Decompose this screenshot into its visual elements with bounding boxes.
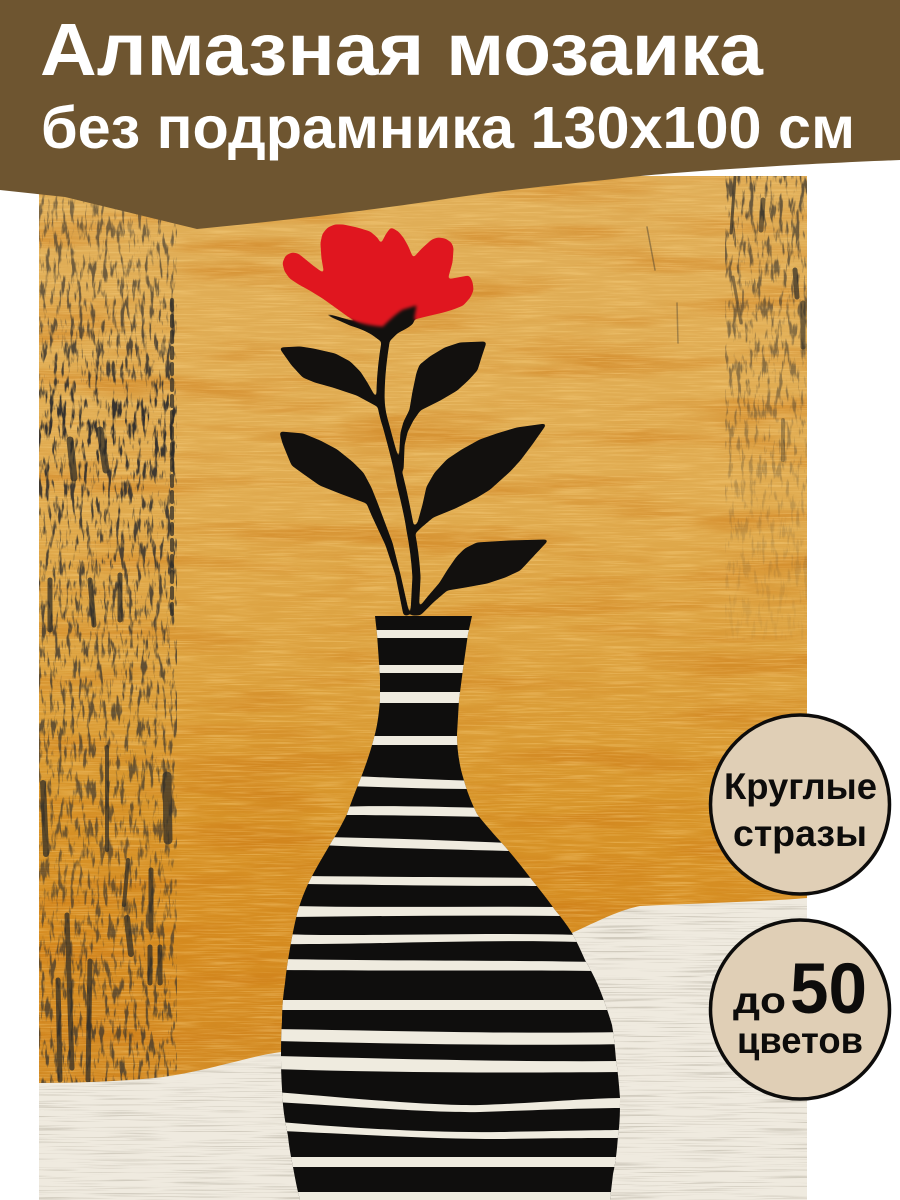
flower sepal: [323, 306, 416, 342]
vase body: [270, 610, 630, 1200]
badge: round rhinestones: [710, 715, 890, 894]
stem: [377, 342, 420, 615]
cream ground: [39, 890, 807, 1200]
broad brush patches: [39, 176, 807, 1096]
badge: up to 50 colours: до: [733, 980, 786, 1021]
red flower: [283, 225, 473, 327]
leaf lower right: [416, 540, 548, 615]
left band dark scratch marks: [39, 190, 177, 1090]
left band long streaks: [43, 300, 172, 1080]
plant: [280, 225, 548, 615]
title: Алмазная мозаика: [40, 8, 764, 91]
subtitle: без подрамника 130х100 см: [41, 95, 855, 161]
badge: up to 50 colours: [710, 920, 890, 1099]
ochre painted wall: [39, 176, 807, 1083]
badge: round rhinestones: Круглые: [724, 766, 877, 807]
leaf middle left: [280, 432, 409, 615]
vase white stripes: [275, 630, 625, 1200]
leaf upper left: [280, 347, 381, 408]
leaf upper right: [400, 342, 486, 470]
header banner: [0, 0, 900, 229]
panel: painting: [39, 176, 807, 1200]
fine light brush strokes: [39, 176, 807, 1096]
top right long streaks: [647, 177, 803, 460]
badge: round rhinestones: стразы: [733, 813, 867, 854]
top right dark scratch marks: [725, 176, 807, 640]
striped vase: [270, 610, 630, 1200]
badge: up to 50 colours: 50: [790, 950, 867, 1029]
leaf middle right: [411, 424, 546, 535]
badge: up to 50 colours: цветов: [737, 1020, 863, 1061]
